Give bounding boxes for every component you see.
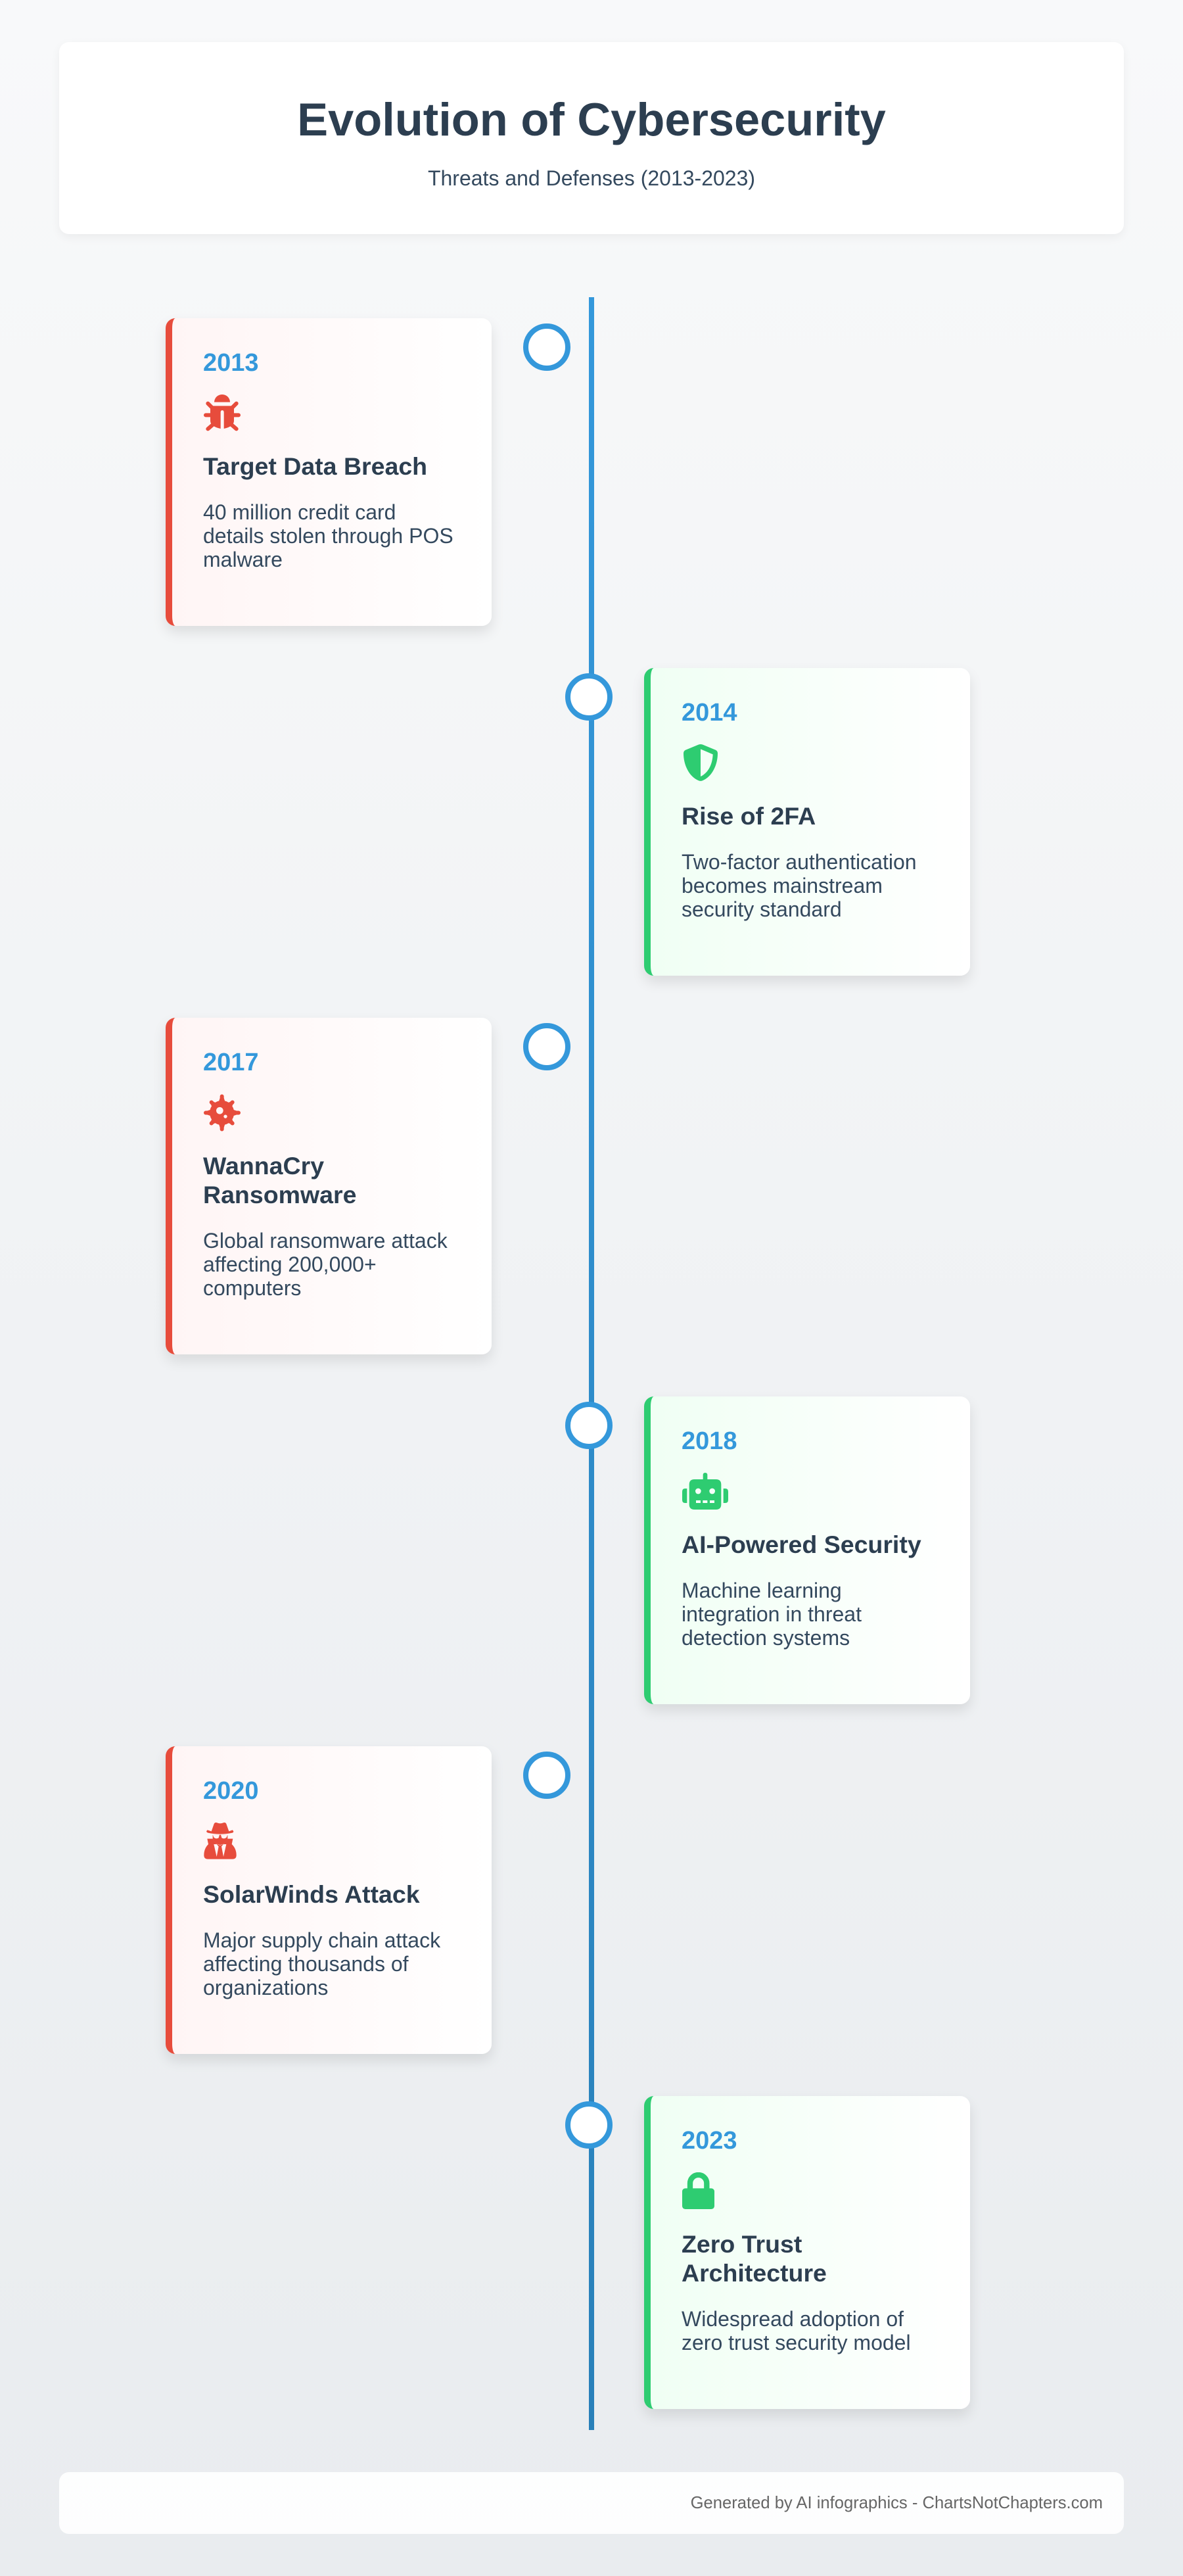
- timeline marker 2018: [565, 1402, 613, 1449]
- description: organizations: [203, 1976, 328, 1999]
- icon: virus: [204, 1094, 241, 1131]
- year: 2013: [203, 349, 259, 377]
- description: [682, 850, 917, 921]
- description: computers: [203, 1276, 301, 1300]
- event title: Ransomware: [203, 1181, 356, 1208]
- panel: 2013 Target Data Breach: [166, 318, 492, 626]
- description: affecting 200,000+: [203, 1252, 377, 1276]
- description: 40 million credit card: [203, 500, 396, 524]
- footer panel: [59, 2472, 1124, 2534]
- description: [203, 500, 453, 571]
- panel: 2017 WannaCry Ransomware: [166, 1018, 492, 1354]
- year: 2014: [682, 699, 737, 727]
- panel: 2023 Zero Trust Architecture: [644, 2096, 970, 2409]
- description: Widespread adoption of: [682, 2307, 904, 2331]
- icon: lock: [682, 2172, 714, 2209]
- event title: Architecture: [682, 2259, 827, 2287]
- timeline marker 2020: [523, 1752, 570, 1799]
- description: Major supply chain attack: [203, 1928, 440, 1952]
- description: detection systems: [682, 1626, 850, 1650]
- icon: spy: [204, 1823, 237, 1859]
- footer credit text: Generated by AI infographics - ChartsNotChapters.com: [691, 2494, 1103, 2512]
- description: affecting thousands of: [203, 1952, 409, 1976]
- year: 2023: [682, 2127, 737, 2155]
- event title: Rise of 2FA: [682, 802, 816, 830]
- year: 2020: [203, 1777, 259, 1805]
- description: security standard: [682, 897, 842, 921]
- description: [203, 1928, 440, 1999]
- event title: AI-Powered Security: [682, 1531, 921, 1558]
- icon: shield: [684, 744, 718, 781]
- description: [682, 1579, 862, 1650]
- panel: 2020 SolarWinds Attack: [166, 1746, 492, 2054]
- subtitle: Threats and Defenses (2013-2023): [428, 166, 755, 190]
- description: becomes mainstream: [682, 874, 883, 897]
- icon: robot: [682, 1473, 728, 1510]
- event title: SolarWinds Attack: [203, 1880, 420, 1908]
- header panel: [59, 42, 1124, 234]
- event title: [682, 2230, 827, 2287]
- description: Machine learning: [682, 1579, 842, 1602]
- timeline marker 2017: [523, 1023, 570, 1070]
- description: [682, 2307, 911, 2354]
- description: zero trust security model: [682, 2331, 911, 2354]
- icon: bug: [204, 394, 241, 431]
- description: malware: [203, 548, 283, 571]
- event title: Target Data Breach: [203, 452, 427, 480]
- description: Global ransomware attack: [203, 1229, 448, 1252]
- description: [203, 1229, 448, 1300]
- panel: 2018 AI-Powered Security: [644, 1396, 970, 1704]
- event title: Zero Trust: [682, 2230, 802, 2258]
- description: integration in threat: [682, 1602, 862, 1626]
- event title: [203, 1152, 356, 1208]
- description: Two-factor authentication: [682, 850, 917, 874]
- title: Evolution of Cybersecurity: [297, 93, 886, 145]
- timeline vertical line: [589, 297, 594, 2430]
- year: 2017: [203, 1049, 259, 1076]
- description: details stolen through POS: [203, 524, 453, 548]
- timeline marker 2014: [565, 673, 613, 721]
- timeline marker 2023: [565, 2101, 613, 2149]
- year: 2018: [682, 1427, 737, 1455]
- event title: WannaCry: [203, 1152, 324, 1180]
- panel: 2014 Rise of 2FA: [644, 668, 970, 976]
- timeline marker 2013: [523, 323, 570, 371]
